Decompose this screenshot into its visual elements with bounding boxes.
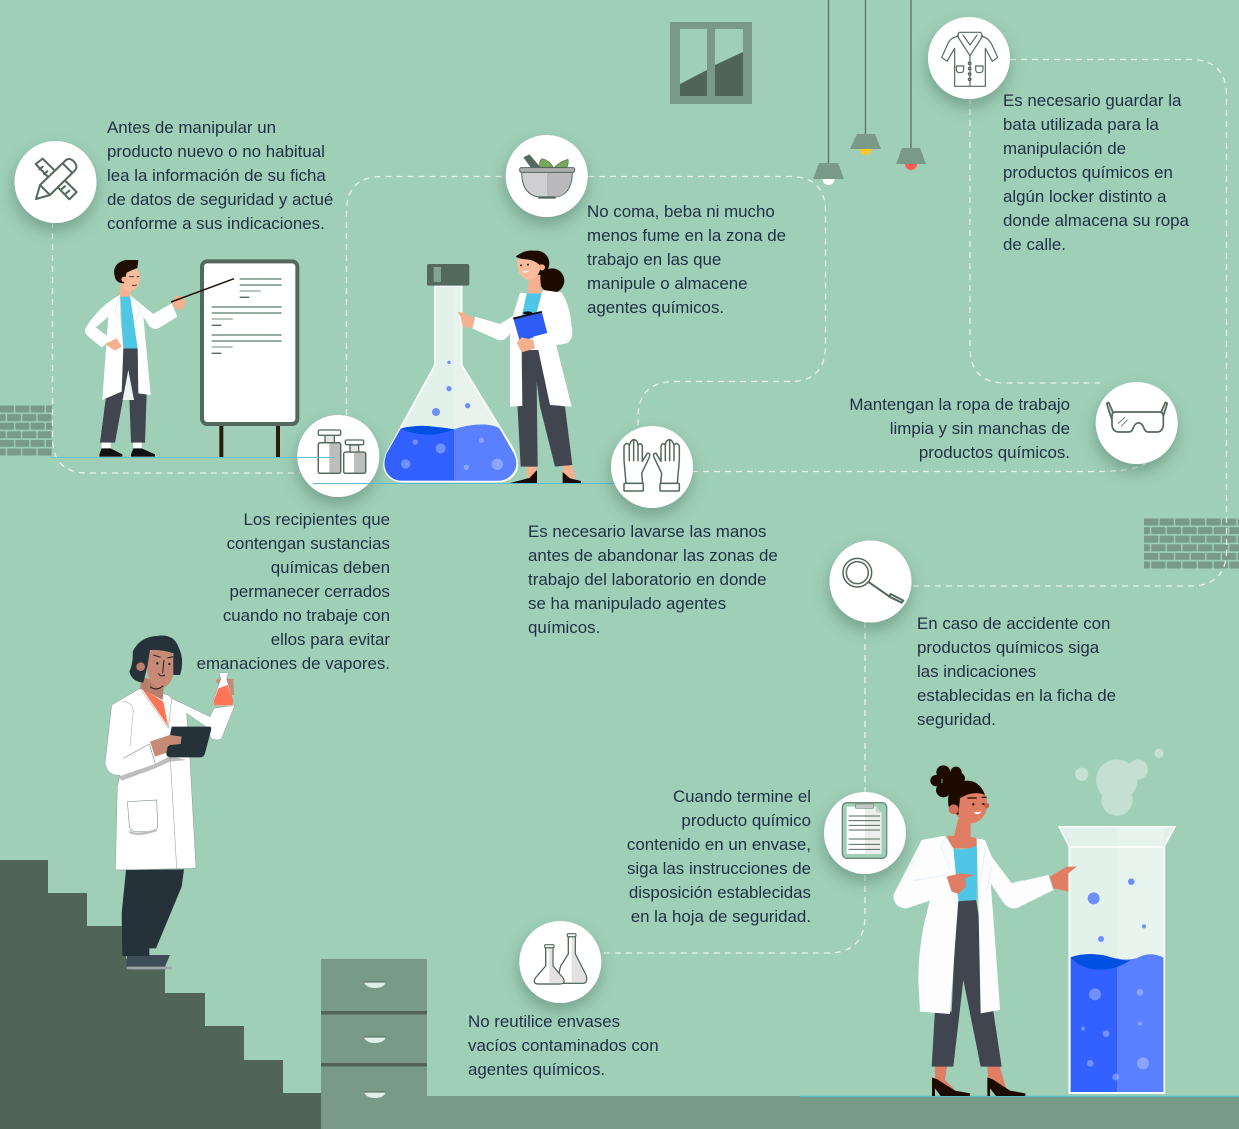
text: in case of accident: productos químicos siga	[917, 638, 1100, 657]
text: disposal instructions: siga las instrucciones de	[627, 859, 811, 878]
filing cabinet	[321, 959, 427, 1129]
icon: magnifying glass	[830, 540, 912, 622]
icon: ruler and pencil	[14, 141, 96, 223]
scientist with tablet and flask	[105, 636, 235, 970]
icon: lab coat	[928, 17, 1010, 99]
text: store lab coat: manipulación de	[1003, 139, 1126, 158]
text: keep clothes clean: Mantengan la ropa de trabajo	[849, 395, 1070, 414]
presentation board	[202, 261, 297, 457]
text: keep containers closed: cuando no trabaje con	[223, 606, 390, 625]
stairs	[0, 860, 322, 1129]
text: keep containers closed: contengan sustancias	[227, 534, 390, 553]
text: store lab coat: bata utilizada para la	[1003, 115, 1159, 134]
text: read safety data sheet: Antes de manipular un	[107, 118, 276, 137]
ground line under flask	[313, 482, 655, 484]
text: no eating or drinking: manipule o almacene	[587, 274, 748, 293]
text: read safety data sheet: de datos de seguridad y actué	[107, 190, 333, 209]
text: do not reuse containers: vacíos contaminados con	[468, 1036, 659, 1055]
scientist with beaker	[893, 749, 1175, 1096]
text: disposal instructions: en la hoja de seguridad.	[631, 907, 811, 926]
ground line left	[50, 456, 335, 458]
floor	[427, 1096, 1239, 1129]
scientist with clipboard	[457, 250, 581, 483]
text: wash hands: antes de abandonar las zonas de	[528, 546, 778, 565]
brick wall left	[0, 405, 52, 456]
text: read safety data sheet: producto nuevo o no habitual	[107, 142, 325, 161]
text: keep containers closed: emanaciones de vapores.	[197, 654, 390, 673]
window	[670, 22, 752, 104]
text: wash hands: se ha manipulado agentes	[528, 594, 726, 613]
hanging lamps	[813, 0, 926, 185]
icon: weight bottles	[297, 415, 379, 497]
text: keep clothes clean: productos químicos.	[919, 443, 1070, 462]
text: no eating or drinking: No coma, beba ni mucho	[587, 202, 775, 221]
text: wash hands: químicos.	[528, 618, 600, 637]
text: wash hands: trabajo del laboratorio en donde	[528, 570, 767, 589]
text: no eating or drinking: agentes químicos.	[587, 298, 724, 317]
icon: laboratory flasks	[519, 921, 601, 1003]
scientist with pointer	[85, 260, 234, 457]
text: disposal instructions: producto químico	[681, 811, 811, 830]
text: in case of accident: En caso de accidente con	[917, 614, 1110, 633]
text: disposal instructions: contenido en un envase,	[627, 835, 811, 854]
text: read safety data sheet: lea la información de su ficha	[107, 166, 326, 185]
text: disposal instructions: disposición establecidas	[629, 883, 811, 902]
text: no eating or drinking: trabajo en las que	[587, 250, 721, 269]
icon: clipboard	[824, 792, 906, 874]
icon: safety goggles	[1096, 382, 1178, 464]
dashed connector line	[52, 60, 1226, 953]
text: wash hands: Es necesario lavarse las manos	[528, 522, 766, 541]
text: keep clothes clean: limpia y sin manchas de	[890, 419, 1070, 438]
text: keep containers closed: ellos para evitar	[271, 630, 390, 649]
ground line over bottle icon	[50, 456, 335, 458]
text: do not reuse containers: No reutilice envases	[468, 1012, 620, 1031]
text: disposal instructions: Cuando termine el	[673, 787, 811, 806]
text: keep containers closed: Los recipientes que	[244, 510, 390, 529]
text: in case of accident: establecidas en la ficha de	[917, 686, 1116, 705]
text: store lab coat: Es necesario guardar la	[1003, 91, 1182, 110]
text: store lab coat: algún locker distinto a	[1003, 187, 1167, 206]
text: do not reuse containers: agentes químicos.	[468, 1060, 605, 1079]
text: store lab coat: productos químicos en	[1003, 163, 1173, 182]
text: store lab coat: de calle.	[1003, 235, 1066, 254]
brick wall right	[1144, 518, 1239, 570]
text: in case of accident: las indicaciones	[917, 662, 1036, 681]
conical flask	[384, 264, 517, 482]
text: read safety data sheet: conforme a sus indicaciones.	[107, 214, 325, 233]
text: keep containers closed: permanecer cerrados	[229, 582, 390, 601]
text: store lab coat: donde almacena su ropa	[1003, 211, 1190, 230]
floor line	[800, 1096, 1239, 1098]
icon: mortar and pestle	[506, 135, 588, 217]
icon: gloves	[611, 426, 693, 508]
text: keep containers closed: químicas deben	[271, 558, 390, 577]
text: no eating or drinking: menos fume en la zona de	[587, 226, 786, 245]
text: in case of accident: seguridad.	[917, 710, 996, 729]
